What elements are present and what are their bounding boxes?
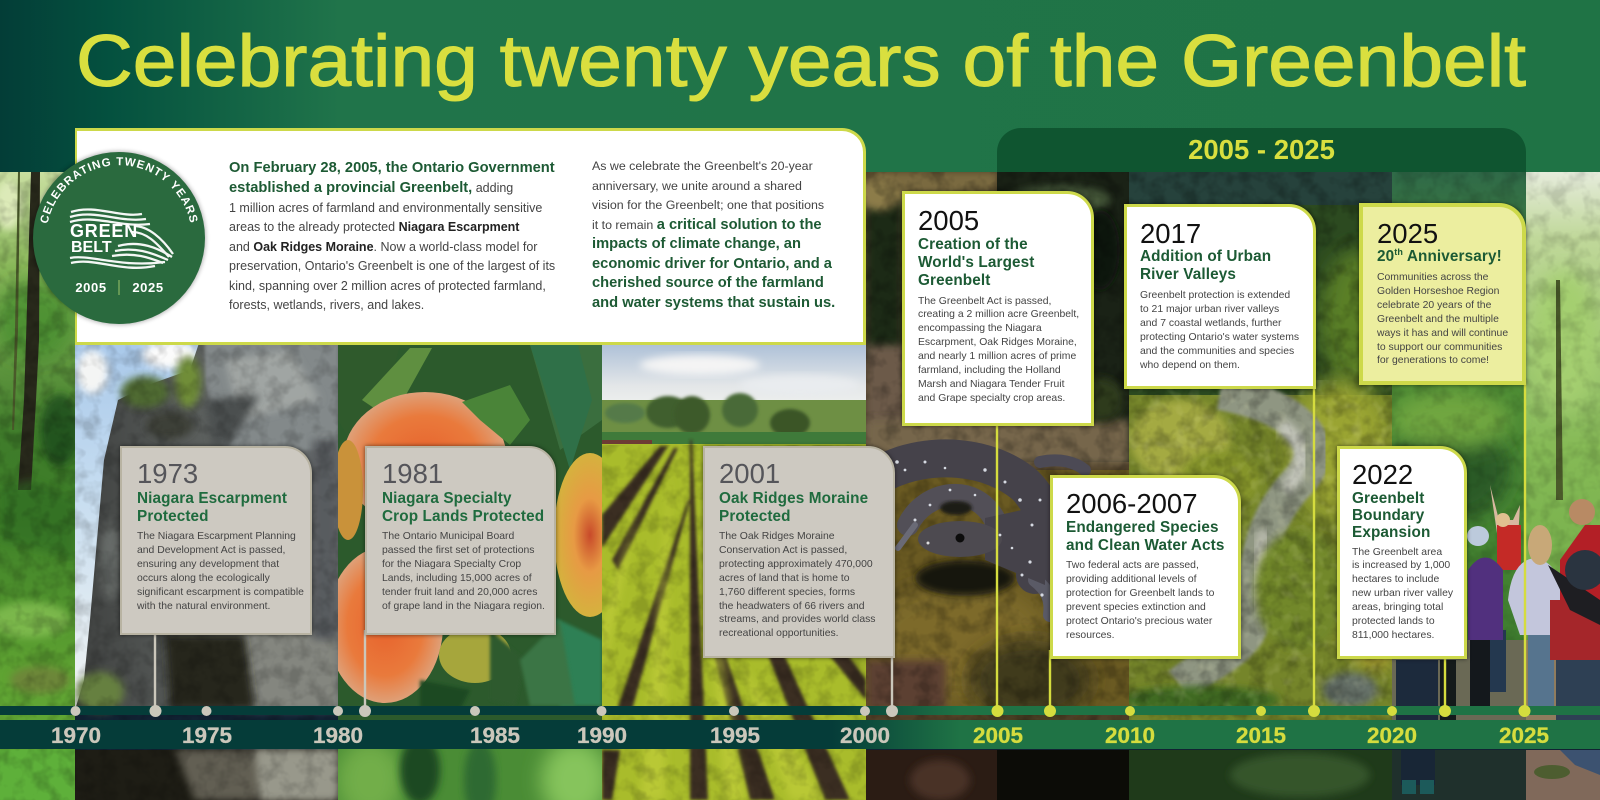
timeline axis: 2020 xyxy=(1367,723,1417,748)
card: 2025: celebrate 20 years of the xyxy=(1377,300,1491,311)
card: 2022: Boundary xyxy=(1352,507,1424,524)
card: 2005: creating a 2 million acre Greenbelt, xyxy=(918,309,1079,320)
card: 2001: acres of land that is home to xyxy=(719,573,850,584)
intro text: left column: preservation, Ontario's Greenbelt is one of the largest of its xyxy=(229,259,555,273)
intro text: left column: established a provincial Greenbelt, adding xyxy=(229,180,513,196)
card: 2017: and the communities and species xyxy=(1140,346,1294,357)
card: 2025: to support our communities xyxy=(1377,342,1502,353)
intro text: right column: vision for the Greenbelt; one that positions xyxy=(592,198,824,212)
card: 2017: who depend on them. xyxy=(1140,360,1240,371)
icon: Greenbelt 20th anniversary badge: BELT xyxy=(71,239,112,256)
card: 2017: River Valleys xyxy=(1140,266,1236,283)
timeline axis: 1980 xyxy=(313,723,363,748)
card: 2001: Conservation Act is passed, xyxy=(719,545,847,556)
card: 2017: 2017 xyxy=(1140,218,1201,249)
icon: Greenbelt 20th anniversary badge: 2005 xyxy=(75,280,107,295)
card: 2005: farmland, including the Holland xyxy=(918,365,1061,376)
card: 2006-2007: prevent species extinction and xyxy=(1066,602,1206,613)
panel: introduction xyxy=(75,128,866,345)
card: 1981: Lands, including 15,000 acres of xyxy=(382,573,532,584)
card: 2001: Oak Ridges Moraine xyxy=(719,490,868,507)
card: 2005: Creation of the xyxy=(918,236,1028,253)
intro text: right column: As we celebrate the Greenbelt's 20-year xyxy=(592,159,813,173)
photo: Niagara Escarpment cliff xyxy=(75,345,338,800)
intro text: left column: On February 28, 2005, the Ontario Government xyxy=(229,160,555,176)
card: 2001: streams, and provides world class xyxy=(719,614,876,625)
timeline axis: 2000 xyxy=(840,723,890,748)
intro text: left column: forests, wetlands, rivers, and lakes. xyxy=(229,298,424,312)
card: 2001: 1,760 different species, forms xyxy=(719,587,855,598)
card: 2022: hectares to include xyxy=(1352,574,1439,585)
card: 2005: and Grape specialty crop areas. xyxy=(918,393,1065,404)
intro text: left column: and Oak Ridges Moraine. Now a world-class model for xyxy=(229,240,537,254)
photo: crop rows and sky xyxy=(602,345,866,800)
intro text: right column: cherished source of the farmland xyxy=(592,275,824,291)
timeline axis: 1970 xyxy=(51,723,101,748)
icon: Greenbelt 20th anniversary badge: 2025 xyxy=(132,280,164,295)
card: 2022: The Greenbelt area xyxy=(1352,546,1442,558)
intro text: left column xyxy=(229,160,555,312)
card: 2001: recreational opportunities. xyxy=(719,628,839,639)
card: 2022: new urban river valley xyxy=(1352,588,1453,599)
card: 2022: is increased by 1,000 xyxy=(1352,560,1450,571)
card: 1973: ensuring any development that xyxy=(137,559,279,570)
timeline axis: 1990 xyxy=(577,723,627,748)
card: 2005: encompassing the Niagara xyxy=(918,323,1042,334)
card: 2017: and 7 coastal wetlands, further xyxy=(1140,318,1282,329)
card: 2022: Expansion xyxy=(1352,524,1430,541)
card: 2005: Greenbelt xyxy=(918,272,990,289)
heading tab: 2005 - 2025: 2005 - 2025 xyxy=(1188,134,1335,165)
card: 1981 xyxy=(365,446,556,635)
card: 2022: areas, bringing total xyxy=(1352,602,1443,613)
intro text: left column: 1 million acres of farmland and environmentally sensitive xyxy=(229,201,542,215)
card: 2001: 2001 xyxy=(719,458,780,489)
card: 2006-2007: providing additional levels of xyxy=(1066,574,1197,585)
card: 2005: and nearly 1 million acres of prime xyxy=(918,351,1076,362)
card: 2005: 2005 xyxy=(918,205,979,236)
card: 2006-2007 xyxy=(1050,475,1241,659)
card: 1981: The Ontario Municipal Board xyxy=(382,531,514,542)
card: 1973: significant escarpment is compatible xyxy=(137,587,304,598)
card: 2025: Golden Horseshoe Region xyxy=(1377,286,1499,297)
card: 2001: The Oak Ridges Moraine xyxy=(719,531,835,542)
card: 2022: 2022 xyxy=(1352,459,1413,490)
card: 1973: Protected xyxy=(137,508,209,525)
card: 2005: The Greenbelt Act is passed, xyxy=(918,296,1051,306)
intro text: left column: kind, spanning over 2 million acres of protected farmland, xyxy=(229,279,546,293)
card: 2025: for generations to come! xyxy=(1377,355,1489,366)
card: 2022: Greenbelt xyxy=(1352,490,1424,507)
card: 1981: passed the first set of protections xyxy=(382,545,534,556)
card: 2006-2007: protect Ontario's precious water xyxy=(1066,616,1212,627)
timeline axis xyxy=(0,705,1600,749)
card: 1973: Niagara Escarpment xyxy=(137,490,287,507)
card: 1981: of grape land in the Niagara region. xyxy=(382,601,545,612)
card: 1973: and Development Act is passed, xyxy=(137,545,285,556)
timeline axis: 1995 xyxy=(710,723,760,748)
card: 2006-2007: and Clean Water Acts xyxy=(1066,537,1225,554)
card: 1981: for the Niagara Specialty Crop xyxy=(382,559,521,570)
card: 2005: Marsh and Niagara Tender Fruit xyxy=(918,379,1065,390)
card: 1973: The Niagara Escarpment Planning xyxy=(137,531,296,542)
card: 2017: Addition of Urban xyxy=(1140,248,1271,265)
card: 2025: 2025 xyxy=(1377,218,1438,249)
card: 2001 xyxy=(703,446,895,658)
photo: forest and school group xyxy=(1392,172,1600,800)
timeline axis: 1985 xyxy=(470,723,520,748)
card: 2005 xyxy=(902,191,1094,426)
card: 2022: 811,000 hectares. xyxy=(1352,630,1434,641)
card: 1981: 1981 xyxy=(382,458,443,489)
card: 1981: tender fruit land and 20,000 acres xyxy=(382,587,537,598)
card: 2006-2007: protection for Greenbelt lands to xyxy=(1066,588,1214,599)
intro text: right column: economic driver for Ontario, and a xyxy=(592,256,832,272)
card: 1973: occurs along the ecologically xyxy=(137,573,270,584)
timeline axis: 2025 xyxy=(1499,723,1549,748)
intro text: right column: it to remain a critical solution to the xyxy=(592,217,822,233)
intro text: right column: anniversary, we unite around a shared xyxy=(592,179,802,193)
timeline axis: 2005 xyxy=(973,723,1023,748)
card: 2017: protecting Ontario's water systems xyxy=(1140,332,1299,343)
card: 2006-2007: Endangered Species xyxy=(1066,519,1219,536)
icon: Greenbelt 20th anniversary badge: CELEBRATING TWENTY YEARS xyxy=(40,157,198,223)
photo: peaches xyxy=(338,345,602,800)
card: 2006-2007: 2006-2007 xyxy=(1066,488,1198,519)
intro text: right column: and water systems that sustain us. xyxy=(592,295,835,311)
intro text: left column: areas to the already protected Niagara Escarpment xyxy=(229,220,519,234)
card: 2005: World's Largest xyxy=(918,254,1035,271)
photo: river valley from above xyxy=(1129,172,1392,800)
card: 2005: Escarpment, Oak Ridges Moraine, xyxy=(918,337,1077,348)
timeline axis: 2015 xyxy=(1236,723,1286,748)
card: 2017 xyxy=(1124,204,1316,389)
card: 2025 xyxy=(1359,203,1526,385)
card: 1973: with the natural environment. xyxy=(137,601,270,612)
card: 2025: 20th Anniversary! xyxy=(1377,247,1502,265)
card: 2017: to 21 major urban river valleys xyxy=(1140,304,1279,315)
card: 2001: protecting approximately 470,000 xyxy=(719,559,873,570)
card: 1981: Crop Lands Protected xyxy=(382,508,544,525)
timeline axis: 2010 xyxy=(1105,723,1155,748)
timeline axis: 1975 xyxy=(182,723,232,748)
timeline connector lines xyxy=(154,380,1526,706)
header band xyxy=(0,0,1600,172)
card: 2001: the headwaters of 66 rivers and xyxy=(719,601,865,612)
card: 1973 xyxy=(120,446,312,635)
heading tab: 2005 - 2025 xyxy=(997,128,1526,172)
photo: salamander on moss xyxy=(866,172,1129,800)
card: 2025: Communities across the xyxy=(1377,272,1488,283)
title: Celebrating twenty years of the Greenbelt xyxy=(76,18,1526,102)
card: 2025: ways it has and will continue xyxy=(1377,328,1508,339)
card: 1973: 1973 xyxy=(137,458,198,489)
card: 2022: protected lands to xyxy=(1352,616,1435,627)
card: 1981: Niagara Specialty xyxy=(382,490,512,507)
card: 2025: Greenbelt and the multiple xyxy=(1377,314,1499,325)
card: 2022 xyxy=(1337,446,1467,659)
photo: forest path xyxy=(0,172,75,800)
card: 2001: Protected xyxy=(719,508,791,525)
intro text: right column: impacts of climate change, an xyxy=(592,236,801,252)
icon: Greenbelt 20th anniversary badge xyxy=(33,148,208,328)
intro text: right column xyxy=(592,159,835,311)
card: 2006-2007: resources. xyxy=(1066,630,1115,641)
card: 2006-2007: Two federal acts are passed, xyxy=(1066,560,1199,571)
card: 2017: Greenbelt protection is extended xyxy=(1140,290,1290,301)
icon: Greenbelt 20th anniversary badge: GREEN xyxy=(70,221,138,241)
